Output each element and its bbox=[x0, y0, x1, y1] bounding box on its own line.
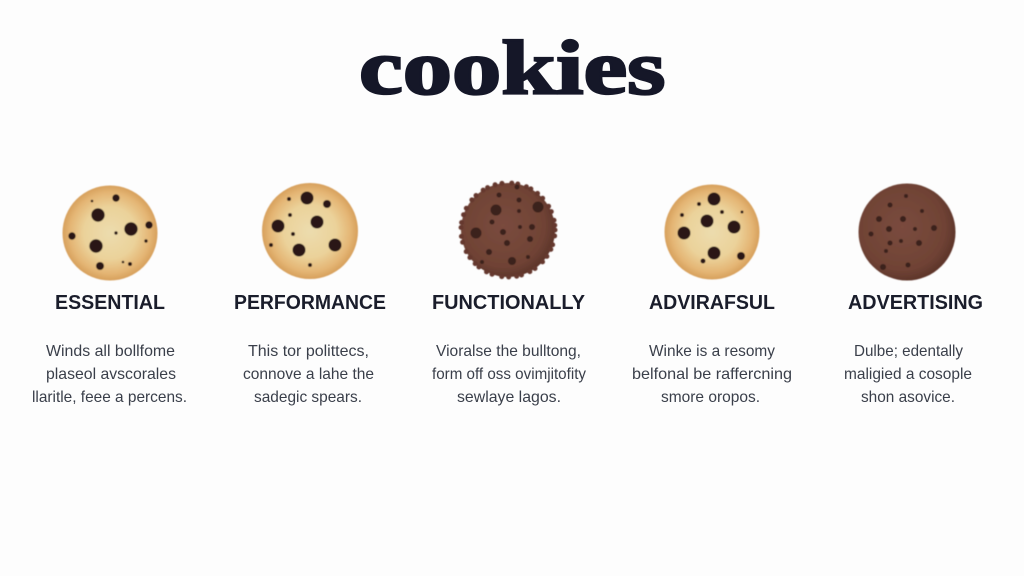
icon: advirafsul cookie bbox=[664, 184, 760, 280]
text block: advertising bbox=[844, 343, 972, 406]
heading: performance: PERFORMANCE bbox=[234, 292, 386, 314]
icon: functionally cookie bbox=[461, 183, 555, 277]
heading: functionally: FUNCTIONALLY bbox=[432, 292, 586, 314]
panel: functionally bbox=[432, 183, 586, 406]
heading: advirafsul: ADVIRAFSUL bbox=[649, 292, 775, 314]
icon: advertising cookie bbox=[858, 184, 956, 280]
panel: performance bbox=[234, 183, 386, 406]
panel: advertising bbox=[844, 184, 983, 406]
text block: essential: llaritle, feee a percens. bbox=[32, 389, 187, 406]
text block: advertising: maligied a cosople bbox=[844, 366, 972, 383]
panel: advirafsul bbox=[632, 184, 792, 406]
text block: advertising: Dulbe; edentally bbox=[854, 343, 963, 360]
text block: essential: Winds all bollfome bbox=[46, 343, 175, 360]
text block: advirafsul: smore oropos. bbox=[661, 389, 760, 406]
text block: performance: connove a lahe the bbox=[243, 366, 374, 383]
text block: performance bbox=[243, 343, 374, 406]
heading: essential: ESSENTIAL bbox=[55, 292, 165, 314]
text block: essential: plaseol avscorales bbox=[46, 366, 176, 383]
text block: functionally: form off oss ovimjitofity bbox=[432, 366, 586, 383]
text block: advirafsul: belfonal be raffercning bbox=[632, 366, 792, 383]
text block: advertising: shon asovice. bbox=[861, 389, 955, 406]
text block: performance: This tor polittecs, bbox=[248, 343, 369, 360]
text block: essential bbox=[32, 343, 187, 406]
text block: performance: sadegic spears. bbox=[254, 389, 362, 406]
text block: functionally bbox=[432, 343, 586, 406]
text block: advirafsul bbox=[632, 343, 792, 406]
icon: performance cookie bbox=[262, 183, 358, 279]
panel: essential bbox=[32, 186, 187, 406]
text block: advirafsul: Winke is a resomy bbox=[649, 343, 775, 360]
title: cookies bbox=[359, 25, 666, 111]
text block: functionally: Vioralse the bulltong, bbox=[436, 343, 581, 360]
heading: advertising: ADVERTISING bbox=[848, 292, 983, 314]
icon: essential cookie bbox=[62, 186, 158, 280]
text block: functionally: sewlaye lagos. bbox=[457, 389, 561, 406]
